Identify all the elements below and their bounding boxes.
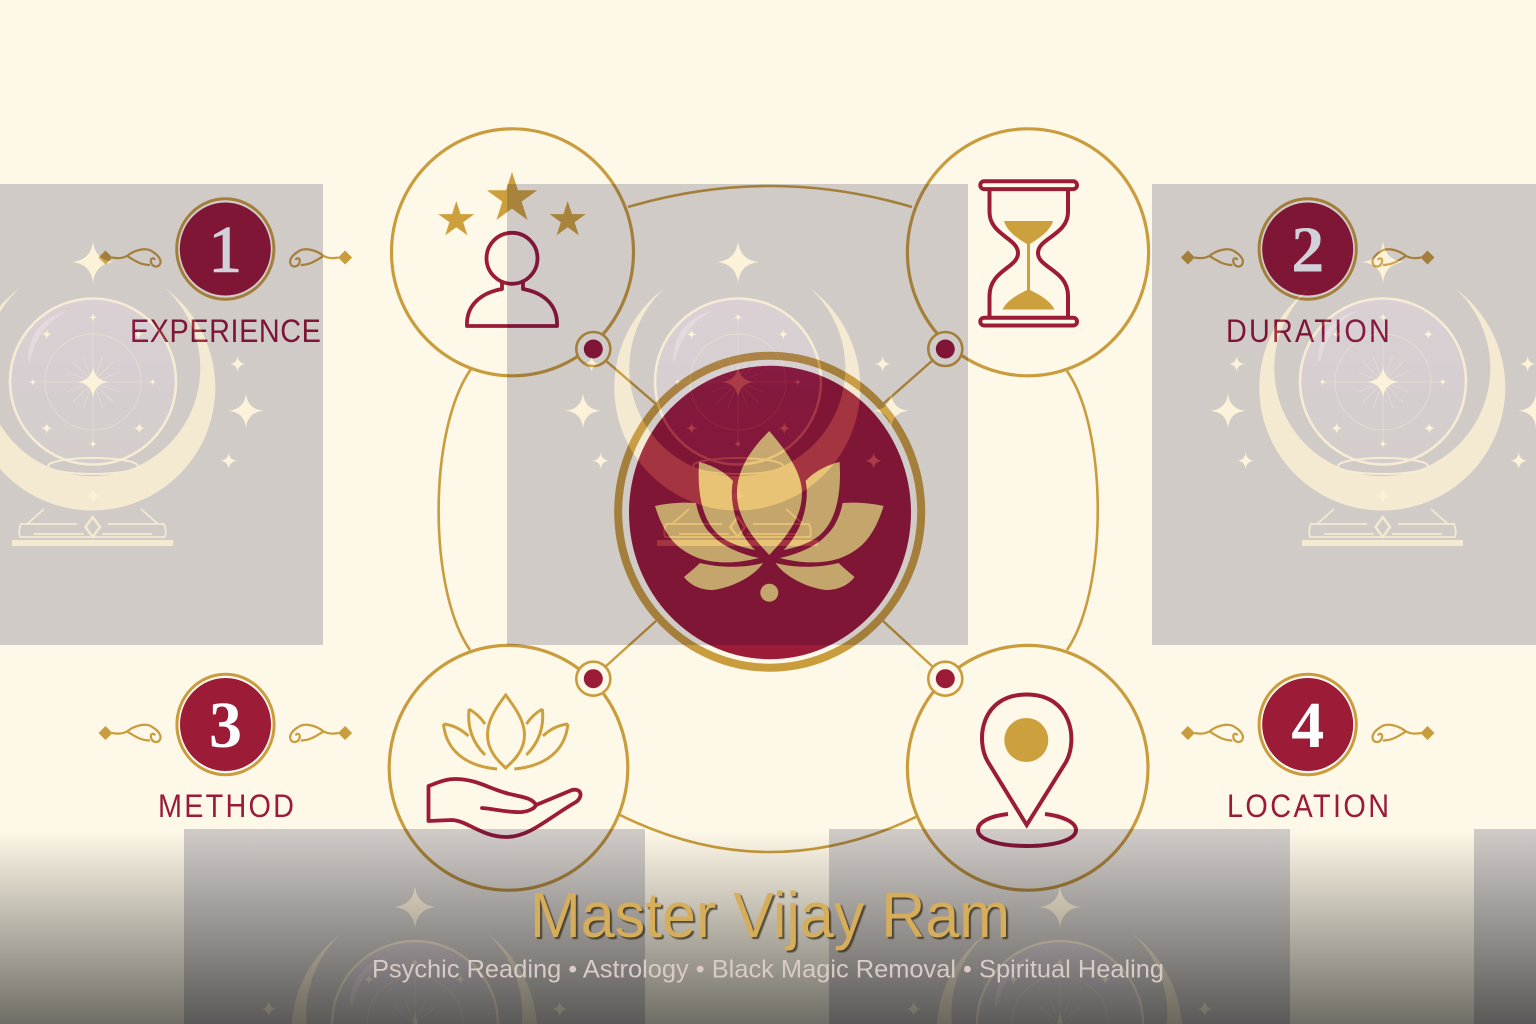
ornament pair 4	[1181, 725, 1434, 742]
outer orbit ring	[439, 186, 1098, 852]
medallion ring	[618, 356, 921, 668]
icon: map pin	[978, 694, 1076, 846]
badge: 3 method	[98, 674, 352, 824]
icon: three stars	[438, 172, 586, 235]
badge: 1 experience	[98, 199, 352, 349]
numeral 1: 1	[209, 214, 242, 286]
badge: 2 duration	[1181, 199, 1434, 349]
watermark crystal ball tile 5	[906, 886, 1213, 1024]
watermark crystal ball tile 1	[0, 241, 264, 546]
number badge 3	[177, 674, 274, 775]
watermark crystal ball tile 4	[261, 886, 568, 1024]
ornament pair 1	[98, 249, 352, 266]
title: Master Vijay Ram	[530, 879, 1010, 951]
label location: LOCATION	[1227, 789, 1389, 824]
circle outline	[392, 129, 634, 376]
icon: person	[467, 233, 557, 326]
panel: method circle	[389, 645, 628, 890]
watermark crystal ball tile 3	[1210, 241, 1536, 546]
numeral 3: 3	[209, 689, 242, 762]
number badge 2	[1259, 199, 1356, 299]
circle outline	[389, 645, 628, 890]
number badge 1	[177, 199, 274, 299]
circle outline	[907, 645, 1148, 890]
icon: outline lotus	[444, 695, 568, 769]
icon: open hand	[428, 779, 581, 837]
panel: duration circle	[907, 129, 1149, 376]
panel: experience circle	[392, 129, 634, 376]
connector lines	[605, 360, 933, 667]
watermark crystal ball tile 2	[566, 241, 908, 546]
label duration: DURATION	[1226, 314, 1390, 349]
medallion disc	[629, 366, 911, 659]
numeral 2: 2	[1291, 214, 1324, 286]
badge: 4 location	[1181, 674, 1434, 824]
central lotus medallion	[618, 356, 921, 668]
number badge 4	[1259, 674, 1356, 775]
label method: METHOD	[158, 789, 294, 824]
subtitle: Psychic Reading • Astrology • Black Magic Removal • Spiritual Healing	[372, 956, 1164, 984]
ornament pair 2	[1181, 249, 1434, 266]
numeral 4: 4	[1291, 689, 1324, 762]
label experience: EXPERIENCE	[130, 314, 321, 349]
panel: location circle	[907, 645, 1148, 890]
ornament pair 3	[98, 725, 352, 742]
icon: hourglass	[980, 181, 1077, 326]
connector nodes	[576, 332, 962, 696]
bottom gradient overlay	[0, 830, 1536, 1024]
lotus emblem	[655, 431, 884, 602]
circle outline	[907, 129, 1149, 376]
